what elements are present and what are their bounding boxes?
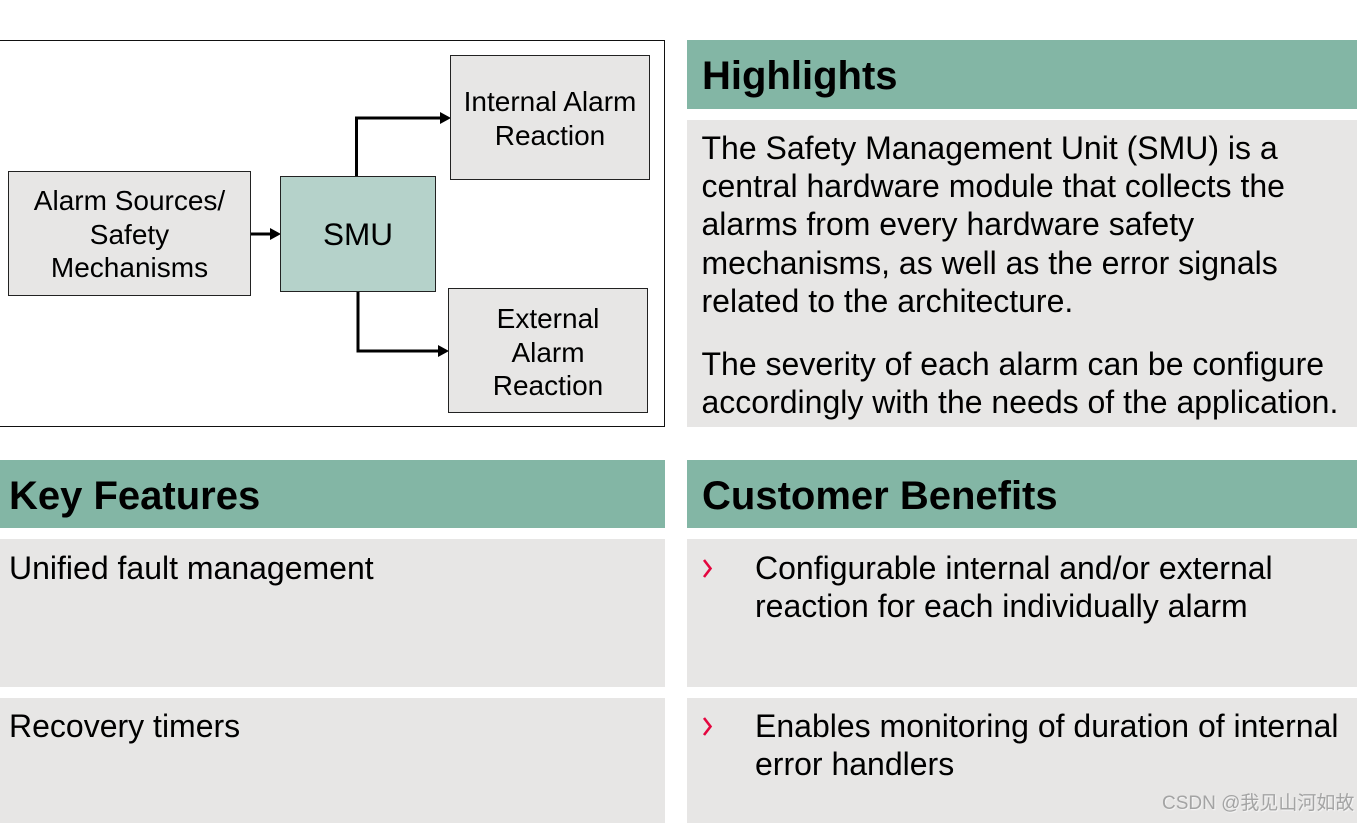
watermark: CSDN @我见山河如故 [1162, 793, 1354, 814]
box: internal alarm reaction: Reaction [495, 120, 605, 151]
box: internal alarm reaction: Internal Alarm [464, 86, 636, 117]
heading: Key Features: Key Features [9, 474, 260, 518]
box: external alarm reaction: External [497, 303, 599, 334]
text: benefit 2: error handlers [755, 746, 954, 782]
box: alarm sources: Alarm Sources/ [34, 185, 225, 216]
text: benefit 1: Configurable internal and/or external [755, 550, 1273, 586]
paragraph: SMU description: alarms from every hardware safety [702, 206, 1194, 242]
panel: recovery timers [0, 698, 665, 823]
heading: Customer Benefits: Customer Benefits [702, 474, 1058, 518]
box: external alarm reaction: Reaction [493, 370, 603, 401]
paragraph: SMU description [702, 130, 1285, 319]
bullet chevron [703, 559, 712, 578]
box: external alarm reaction: Alarm [511, 337, 585, 368]
box: SMU: SMU [323, 216, 393, 252]
bullet chevron [703, 717, 712, 736]
box: alarm sources [8, 171, 251, 296]
box: internal alarm reaction [450, 55, 650, 180]
panel: unified fault management [0, 539, 665, 687]
box: SMU [280, 176, 436, 292]
heading: Customer Benefits [687, 460, 1357, 528]
panel: highlights text [687, 120, 1357, 427]
heading: Key Features [0, 460, 665, 528]
box: external alarm reaction [448, 288, 648, 413]
heading: Highlights [687, 40, 1357, 109]
text: benefit 1: reaction for each individually alarm [755, 588, 1248, 624]
paragraph: alarm severity: accordingly with the needs of the application. [702, 384, 1338, 420]
panel: benefit 2 [687, 698, 1357, 823]
paragraph: SMU description: The Safety Management Unit (SMU) is a [702, 130, 1278, 166]
box: alarm sources: Safety [90, 219, 169, 250]
paragraph: SMU description: mechanisms, as well as the error signals [702, 245, 1278, 281]
heading: Highlights: Highlights [702, 54, 898, 98]
paragraph: SMU description: related to the architecture. [702, 283, 1073, 319]
text: unified fault management: Unified fault management [9, 550, 374, 586]
text: benefit 1 [755, 550, 1273, 624]
panel: benefit 1 [687, 539, 1357, 687]
text: benefit 2: Enables monitoring of duration of internal [755, 708, 1338, 744]
paragraph: SMU description: central hardware module that collects the [702, 168, 1285, 204]
paragraph: alarm severity [702, 346, 1338, 420]
paragraph: alarm severity: The severity of each alarm can be configure [702, 346, 1324, 382]
diagram arrows [251, 112, 450, 357]
text: benefit 2 [755, 708, 1338, 782]
box: alarm sources: Mechanisms [51, 252, 208, 283]
text: recovery timers: Recovery timers [9, 708, 240, 744]
panel: SMU block diagram [0, 40, 665, 427]
